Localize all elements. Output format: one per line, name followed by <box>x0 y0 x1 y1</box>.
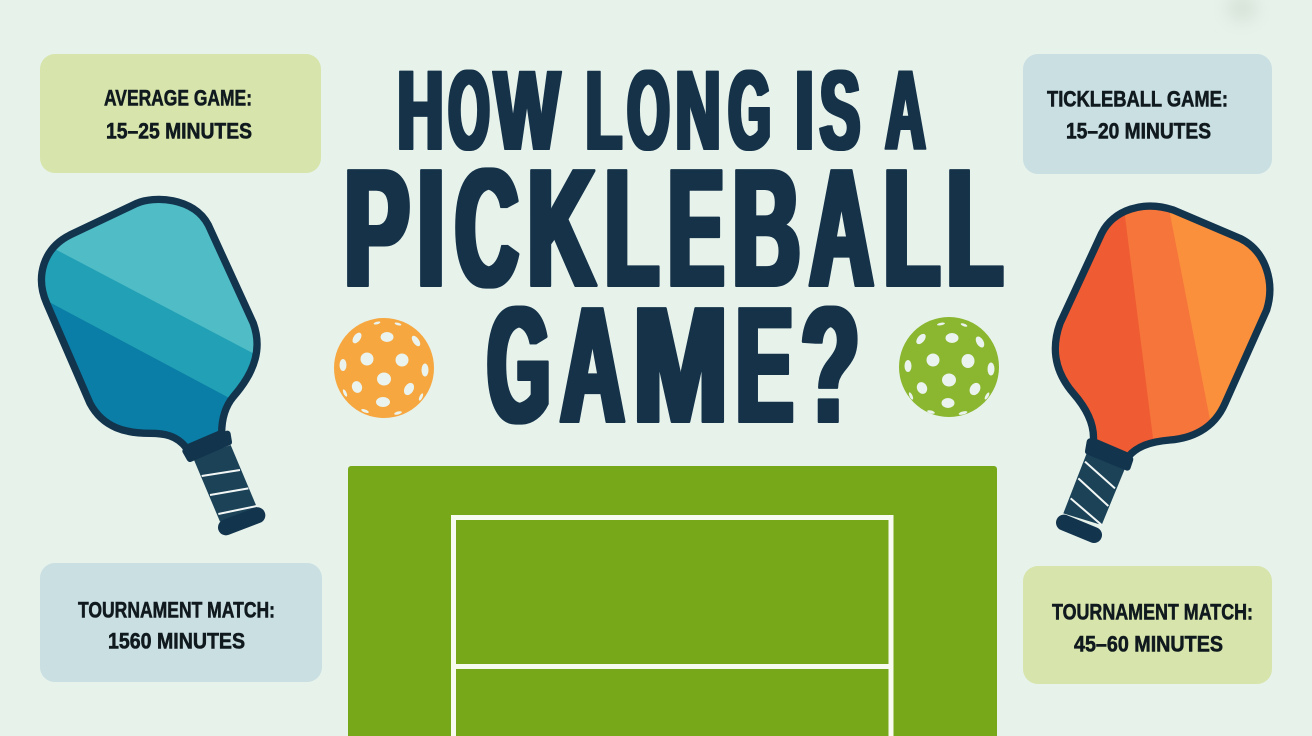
callout: pickleball game: 15–20 MINUTES <box>1066 118 1211 144</box>
callout: tournament match left <box>40 563 322 682</box>
title: A <box>561 273 624 456</box>
callout: tournament match right <box>1023 566 1272 684</box>
callout: tournament match right: 45–60 MINUTES <box>1074 632 1223 656</box>
title: O <box>448 48 490 173</box>
title: L <box>884 134 940 321</box>
callout: tournament match left: 1560 MINUTES <box>108 628 245 654</box>
title: W <box>494 48 560 173</box>
pickleball court <box>348 466 997 736</box>
title: I <box>795 47 814 173</box>
callout: pickleball game <box>1023 54 1272 174</box>
title: E <box>668 135 724 321</box>
title: K <box>528 135 595 321</box>
title: O <box>627 47 670 173</box>
callout: average game <box>40 54 321 173</box>
title: L <box>586 48 622 173</box>
callout: tournament match right: TOURNAMENT MATCH: <box>1052 600 1253 624</box>
icon: green ball <box>899 317 999 417</box>
title: A <box>886 47 925 173</box>
callout: average game: AVERAGE GAME: <box>104 86 252 110</box>
title: A <box>810 135 873 322</box>
title: N <box>675 49 721 174</box>
title: ? <box>801 275 859 457</box>
title: L <box>605 135 659 322</box>
icon: orange ball <box>334 318 434 418</box>
title: I <box>418 134 445 321</box>
callout: average game: 15–25 MINUTES <box>106 118 252 144</box>
title: E <box>736 273 793 457</box>
title <box>344 47 1003 457</box>
callout: tournament match left: TOURNAMENT MATCH: <box>78 598 275 622</box>
icon: blue paddle <box>38 196 266 536</box>
title: M <box>633 274 728 456</box>
title: L <box>947 134 1003 321</box>
title: S <box>820 49 860 174</box>
title: C <box>455 136 518 322</box>
title: B <box>733 135 800 321</box>
title: G <box>488 274 550 457</box>
icon: orange paddle <box>1052 202 1274 543</box>
callout: pickleball game: TICKLEBALL GAME: <box>1047 86 1228 112</box>
title: P <box>344 134 409 321</box>
title: H <box>397 48 444 174</box>
title: G <box>728 47 771 173</box>
